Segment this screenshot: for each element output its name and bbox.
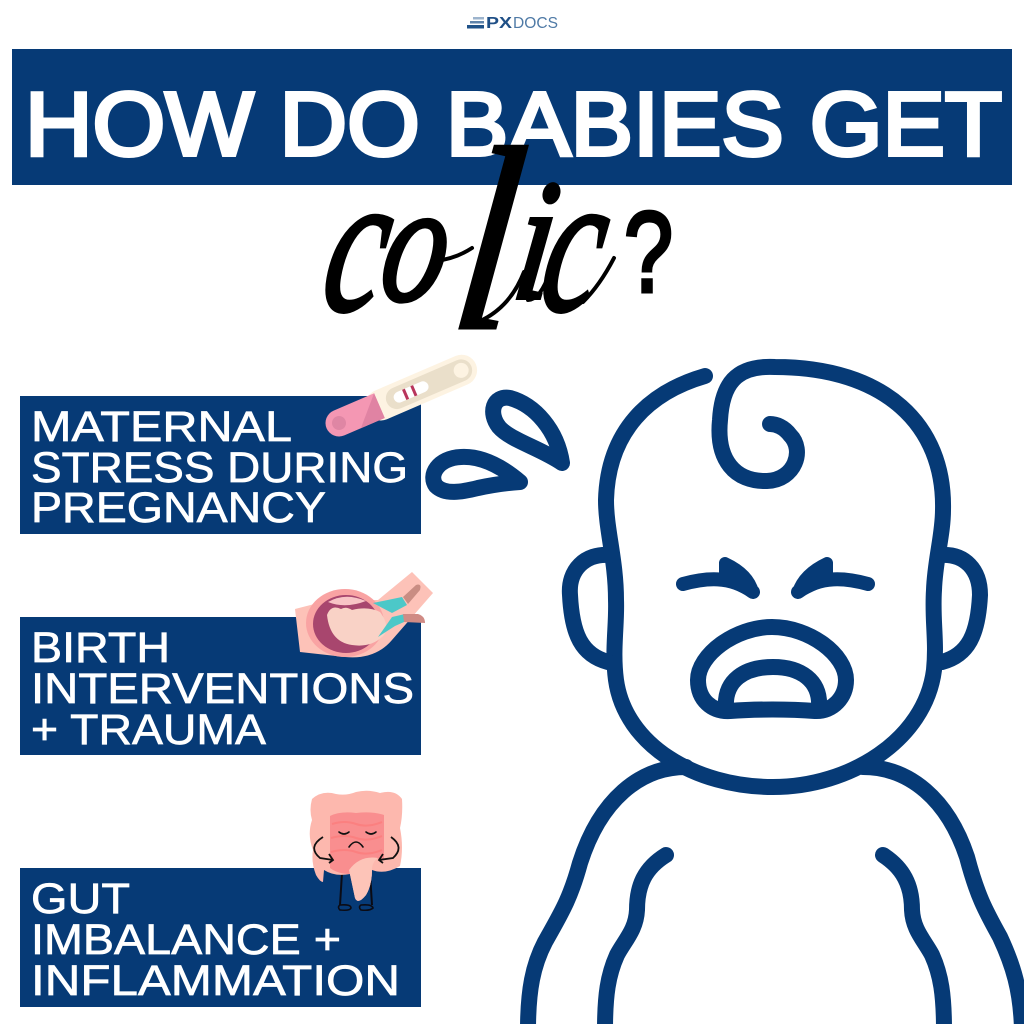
script word: colic?: ? (624, 190, 673, 316)
logo: PX Docs (467, 15, 558, 32)
panel: maternal stress: STRESS DURING (31, 444, 408, 492)
panel: gut imbalance: IMBALANCE + (31, 916, 341, 964)
head outline with curl (606, 367, 943, 787)
panel: birth interventions: BIRTH (31, 624, 170, 672)
panel: gut imbalance (20, 868, 421, 1007)
script connectors (435, 248, 614, 322)
left eye wedge (725, 563, 753, 592)
panel: maternal stress (20, 396, 421, 534)
panel: maternal stress: PREGNANCY (31, 484, 326, 532)
panel: gut imbalance: GUT (31, 875, 130, 923)
panel: birth interventions: + TRAUMA (31, 706, 266, 754)
icon: sad intestine (310, 791, 402, 910)
script word: colic?: c (528, 133, 626, 354)
script word: colic?: o (369, 149, 466, 337)
right body (863, 767, 1022, 1024)
illustration: crying baby (528, 367, 1022, 1024)
right eye (798, 579, 868, 592)
title banner (12, 49, 1012, 185)
icon: fetus in womb with forceps hands (295, 572, 433, 657)
left arm line (605, 855, 666, 1024)
left eye (683, 579, 753, 592)
panel: maternal stress: MATERNAL (31, 403, 292, 451)
right arm line (883, 855, 944, 1024)
left body (528, 767, 686, 1024)
script word: colic?: l (441, 94, 539, 385)
right eye wedge (798, 563, 827, 592)
mouth outer (698, 627, 846, 711)
right ear (940, 555, 980, 662)
panel: birth interventions: INTERVENTIONS (31, 665, 414, 713)
panel: birth interventions (20, 617, 421, 755)
icon: pregnancy test (320, 350, 482, 443)
icon: sweat drops (433, 398, 562, 492)
logo: PX Docs: DOCS (513, 15, 558, 32)
script word: colic?: i (505, 144, 570, 335)
title banner: HOW DO BABIES GET (25, 75, 1002, 175)
panel: gut imbalance: INFLAMMATION (31, 957, 400, 1005)
logo: PX Docs: PX (486, 15, 513, 32)
script word: colic? (310, 94, 673, 385)
left ear (570, 555, 610, 662)
script word: colic?: c (310, 133, 410, 354)
mouth inner (726, 667, 819, 708)
